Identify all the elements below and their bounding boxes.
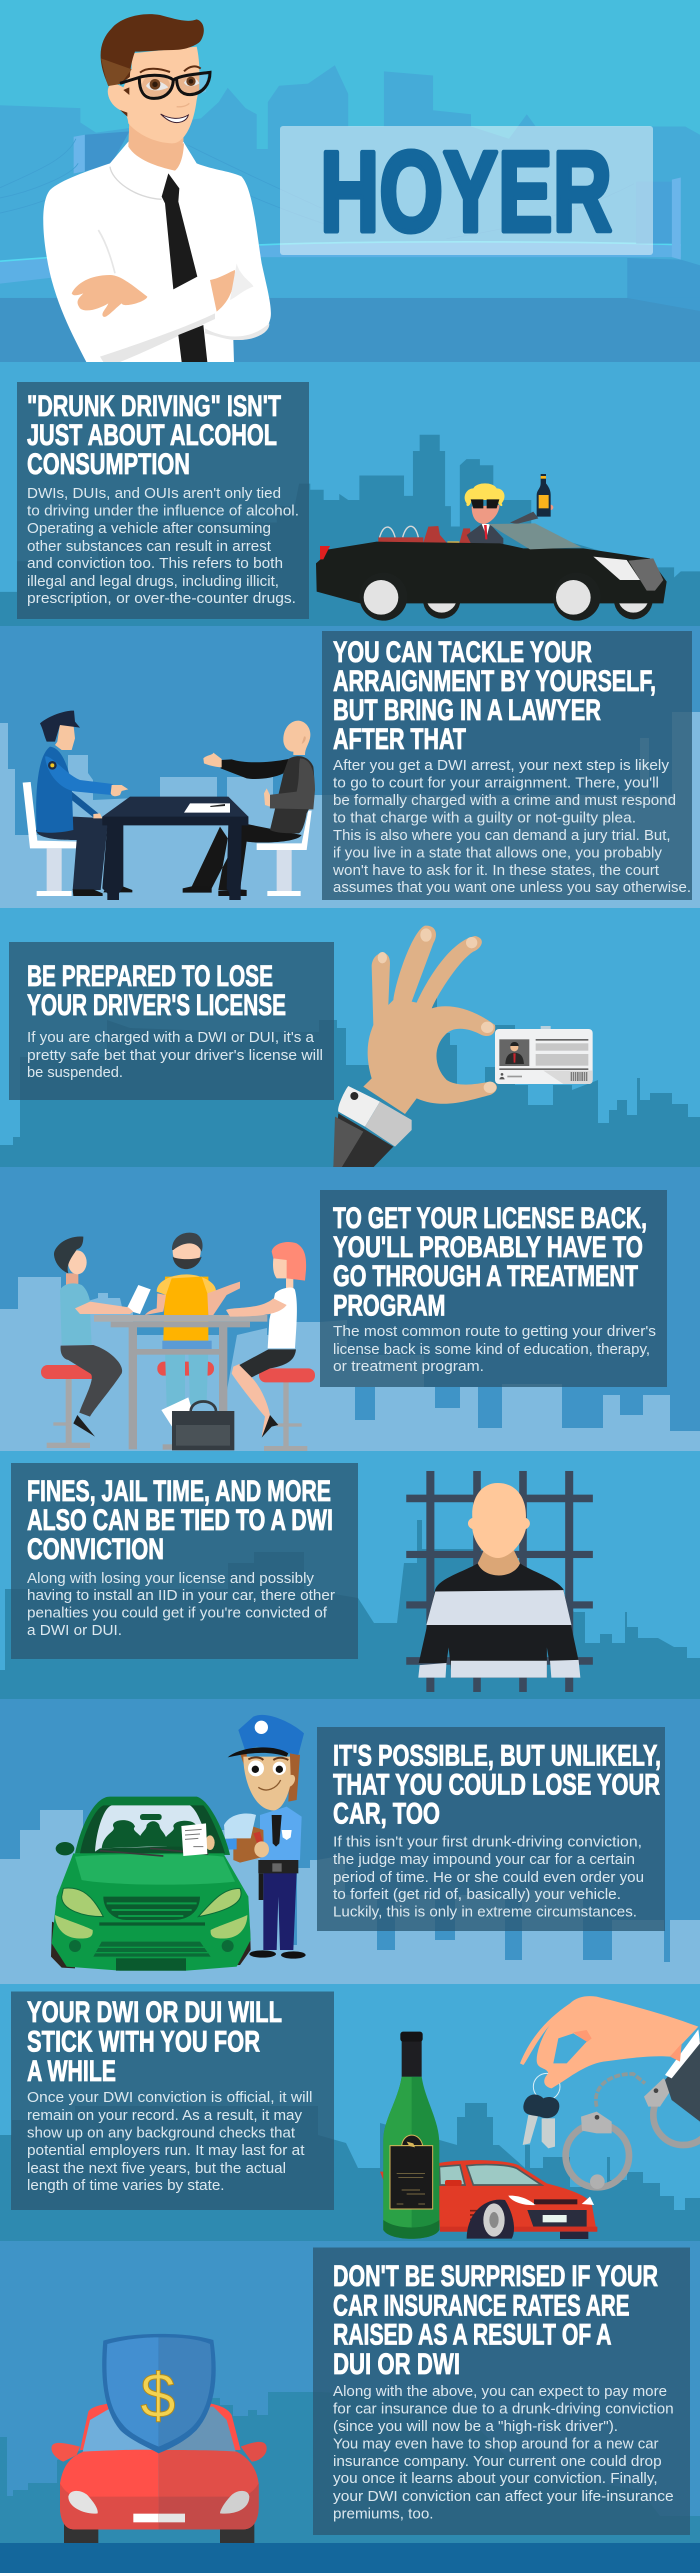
illustration: police officer ticketing green car bbox=[51, 1715, 306, 1971]
text block: car insurance bbox=[333, 2383, 674, 2523]
heading: treatment: PROGRAM bbox=[333, 1290, 446, 1322]
section: arraignment bbox=[0, 626, 700, 908]
heading: record bbox=[27, 1996, 282, 2088]
footer band bbox=[0, 2543, 700, 2573]
text block: fines bbox=[27, 1570, 335, 1639]
text block: arraignment: assumes that you want one unless you say otherwise. bbox=[333, 879, 691, 896]
text block: record: length of time varies by state. bbox=[27, 2177, 224, 2194]
section: car insurance bbox=[0, 2241, 700, 2543]
illustration: man with glasses bbox=[43, 14, 271, 363]
text block: arraignment: be formally charged with a crime and must respond bbox=[333, 792, 676, 809]
panel: treatment text bbox=[320, 1190, 667, 1387]
text block: treatment: or treatment program. bbox=[333, 1358, 484, 1375]
dark city skyline bbox=[0, 2103, 700, 2241]
heading: fines: FINES, JAIL TIME, AND MORE bbox=[27, 1475, 331, 1508]
text block: fines: a DWI or DUI. bbox=[27, 1622, 122, 1639]
text block: fines: having to install an IID in your car, there other bbox=[27, 1587, 335, 1604]
heading: arraignment bbox=[333, 636, 656, 756]
section: drunk driving bbox=[0, 362, 700, 626]
dark city skyline bbox=[0, 1520, 700, 1699]
text block: car insurance: you once it learns about your conviction. Finally, bbox=[333, 2470, 658, 2487]
text block: license bbox=[27, 1029, 323, 1081]
text block: arraignment: This is also where you can demand a jury trial. But, bbox=[333, 827, 670, 844]
dark city skyline bbox=[0, 2392, 700, 2543]
heading: lose your car: CAR, TOO bbox=[333, 1798, 440, 1830]
heading: fines: CONVICTION bbox=[27, 1533, 164, 1566]
text block: treatment bbox=[333, 1323, 656, 1375]
illustration: police officer and suspect at table bbox=[23, 711, 315, 900]
panel: car insurance text bbox=[313, 2248, 690, 2535]
text block: arraignment bbox=[332, 757, 691, 896]
text block: fines: Along with losing your license and possibly bbox=[27, 1570, 315, 1587]
text block: drunk driving: to driving under the influence of alcohol. bbox=[27, 503, 299, 520]
panel: license text bbox=[9, 942, 334, 1100]
illustration: driver in black convertible with bottle bbox=[316, 474, 667, 621]
section: lose your car bbox=[0, 1699, 700, 1984]
heading: arraignment: BUT BRING IN A LAWYER bbox=[333, 694, 601, 727]
text block: car insurance: your DWI conviction can affect your life-insurance bbox=[333, 2488, 674, 2505]
table bbox=[94, 1315, 267, 1450]
text block: drunk driving: Operating a vehicle after consuming bbox=[27, 520, 271, 537]
text block: record: potential employers run. It may last for at bbox=[27, 2142, 305, 2159]
section: fines and jail bbox=[0, 1451, 700, 1699]
text block: arraignment: won't have to ask for it. In these states, the court bbox=[332, 862, 660, 879]
officer bbox=[214, 1715, 306, 1959]
text block: record: remain on your record. As a result, it may bbox=[27, 2107, 302, 2124]
heading: drunk driving: JUST ABOUT ALCOHOL bbox=[27, 419, 277, 452]
text block: record: Once your DWI conviction is official, it will bbox=[27, 2089, 312, 2106]
text block: record: least the next five years, but the actual bbox=[27, 2160, 286, 2177]
text block: license: be suspended. bbox=[27, 1064, 123, 1081]
light city skyline bbox=[0, 1277, 700, 1451]
section: treatment program bbox=[0, 1167, 700, 1451]
title box bbox=[280, 126, 653, 255]
text block: lose your car: period of time. He or she could even order you bbox=[333, 1869, 644, 1886]
handcuffs bbox=[566, 2074, 700, 2189]
heading: license: YOUR DRIVER'S LICENSE bbox=[27, 989, 286, 1022]
text block: arraignment: to go to court for your arraignment. There, you'll bbox=[333, 774, 659, 792]
heading: car insurance: DUI OR DWI bbox=[333, 2348, 460, 2381]
green car bbox=[51, 1797, 251, 1971]
illustration: hand holding ID card bbox=[333, 926, 593, 1167]
text block: treatment: The most common route to getting your driver's bbox=[333, 1323, 656, 1340]
necktie bbox=[162, 173, 207, 362]
heading: car insurance bbox=[333, 2260, 658, 2381]
illustration: red car with dollar shield bbox=[51, 2334, 267, 2543]
text block: license: If you are charged with a DWI or DUI, it's a bbox=[27, 1029, 315, 1046]
text block: lose your car: If this isn't your first drunk-driving conviction, bbox=[333, 1834, 642, 1850]
illustration: bottle, keys, handcuffs and red car bbox=[380, 1996, 700, 2239]
text block: car insurance: You may even have to shop around for a new car bbox=[333, 2436, 658, 2452]
heading: arraignment: AFTER THAT bbox=[333, 723, 466, 756]
dark city skyline bbox=[0, 435, 700, 626]
icon: briefcase bbox=[161, 1397, 234, 1450]
text block: car insurance: (since you will now be a "high-risk driver"). bbox=[333, 2418, 618, 2435]
light city skyline bbox=[0, 687, 700, 908]
section: record bbox=[0, 1984, 700, 2241]
text block: drunk driving: illegal and legal drugs, including illicit, bbox=[27, 573, 279, 590]
text block: arraignment: to that charge with a guilty or not-guilty plea. bbox=[333, 810, 636, 826]
heading: drunk driving: "DRUNK DRIVING" ISN'T bbox=[27, 390, 281, 423]
section: header bbox=[0, 0, 700, 363]
text block: drunk driving: prescription, or over-the-counter drugs. bbox=[27, 590, 296, 607]
heading: fines: ALSO CAN BE TIED TO A DWI bbox=[27, 1504, 333, 1537]
heading: drunk driving bbox=[27, 390, 281, 481]
text block: record bbox=[27, 2089, 312, 2194]
section: driver's license bbox=[0, 908, 700, 1167]
text block: license: pretty safe bet that your driver's license will bbox=[27, 1047, 323, 1064]
icon: shield with dollar sign: $ bbox=[140, 2361, 176, 2431]
text block: treatment: license back is some kind of education, therapy, bbox=[333, 1341, 650, 1358]
text block: drunk driving: and conviction too. This refers to both bbox=[27, 555, 283, 572]
text block: drunk driving bbox=[27, 485, 299, 607]
heading: record: A WHILE bbox=[27, 2055, 116, 2088]
text block: arraignment: After you get a DWI arrest, your next step is likely bbox=[333, 757, 669, 774]
text block: car insurance: Along with the above, you can expect to pay more bbox=[333, 2383, 667, 2400]
heading: arraignment: YOU CAN TACKLE YOUR bbox=[333, 636, 592, 669]
icon: shield with dollar sign bbox=[102, 2334, 216, 2453]
light city skyline bbox=[0, 1810, 700, 1984]
text block: fines: penalties you could get if you're convicted of bbox=[27, 1604, 328, 1622]
heading: license: BE PREPARED TO LOSE bbox=[27, 960, 273, 993]
panel: lose your car text bbox=[317, 1727, 665, 1931]
wine bottle bbox=[383, 2032, 439, 2239]
heading: record: YOUR DWI OR DUI WILL bbox=[27, 1996, 282, 2029]
dark city skyline bbox=[0, 993, 700, 1167]
heading: license bbox=[27, 960, 286, 1022]
text block: arraignment: if you live in a state that allows one, you probably bbox=[333, 844, 662, 862]
illustration: prisoner behind bars bbox=[406, 1471, 593, 1692]
hand holding keys bbox=[520, 1996, 698, 2148]
panel: fines text bbox=[11, 1463, 358, 1659]
text block: record: show up on any background checks that bbox=[27, 2124, 296, 2142]
text block: car insurance: for car insurance due to a drunk-driving conviction bbox=[333, 2401, 674, 2418]
shirt cuff and sleeve bbox=[665, 2040, 700, 2122]
text block: drunk driving: other substances can result in arrest bbox=[27, 538, 272, 555]
text block: drunk driving: DWIs, DUIs, and OUIs aren't only tied bbox=[27, 485, 281, 502]
parking ticket and hand bbox=[181, 1823, 215, 1856]
panel: record text bbox=[11, 1992, 334, 2210]
text block: car insurance: insurance company. Your current one could drop bbox=[333, 2453, 662, 2470]
illustration: three people at a table bbox=[41, 1233, 315, 1451]
red sports car bbox=[380, 2160, 597, 2239]
text block: lose your car bbox=[333, 1834, 644, 1921]
text block: lose your car: Luckily, this is only in extreme circumstances. bbox=[333, 1904, 637, 1921]
heading: treatment bbox=[333, 1202, 647, 1322]
text block: lose your car: the judge may impound your car for a certain bbox=[333, 1851, 635, 1868]
text block: car insurance: premiums, too. bbox=[333, 2506, 434, 2523]
heading: lose your car bbox=[333, 1740, 661, 1830]
panel: arraignment text bbox=[322, 631, 692, 900]
heading: fines bbox=[27, 1475, 333, 1566]
panel: drunk driving text bbox=[17, 382, 309, 619]
header city skyline and bridge bbox=[0, 65, 700, 362]
heading: record: STICK WITH YOU FOR bbox=[27, 2026, 260, 2059]
text block: lose your car: to forfeit (get rid of, basically) your vehicle. bbox=[333, 1886, 621, 1903]
ID card bbox=[495, 1026, 593, 1084]
heading: drunk driving: CONSUMPTION bbox=[27, 448, 190, 481]
